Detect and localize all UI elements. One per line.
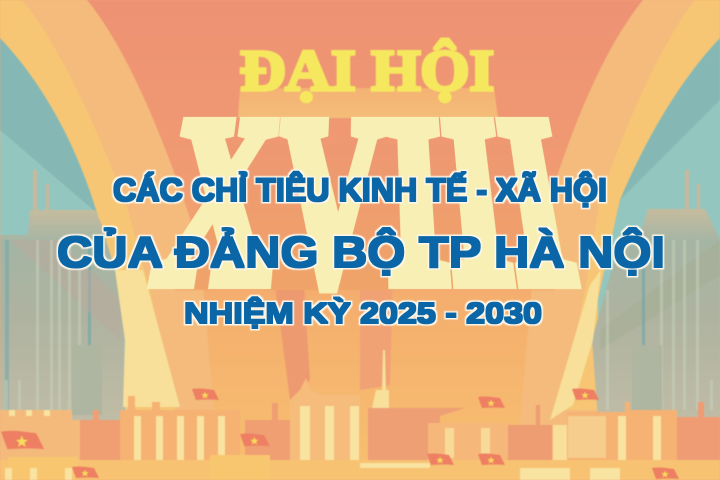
title line 1: CÁC CHỈ TIÊU KINH TẾ - XÃ HỘI (113, 172, 607, 208)
heading: ĐẠI HỘI: ĐẠI HỘI (240, 38, 494, 103)
shadow under heading (238, 88, 498, 118)
left skyline grey towers (0, 170, 125, 420)
flags (1, 388, 679, 479)
city skyline (0, 350, 720, 480)
right skyline grey towers (592, 170, 720, 420)
central coral pylon left (273, 270, 310, 400)
right teal sky (598, 38, 720, 420)
left arch bands (0, 0, 220, 480)
shadow behind XVIII (175, 145, 555, 290)
right light beam (550, 270, 601, 420)
title line 2: CỦA ĐẢNG BỘ TP HÀ NỘI (57, 226, 665, 277)
large numeral XVIII: XVIII (138, 78, 594, 345)
left teal sky (0, 38, 125, 420)
right arch bands (515, 0, 720, 480)
central coral pylon right (360, 265, 393, 390)
title line 3: NHIỆM KỲ 2025 - 2030 (184, 296, 542, 330)
left light beam (115, 270, 180, 407)
